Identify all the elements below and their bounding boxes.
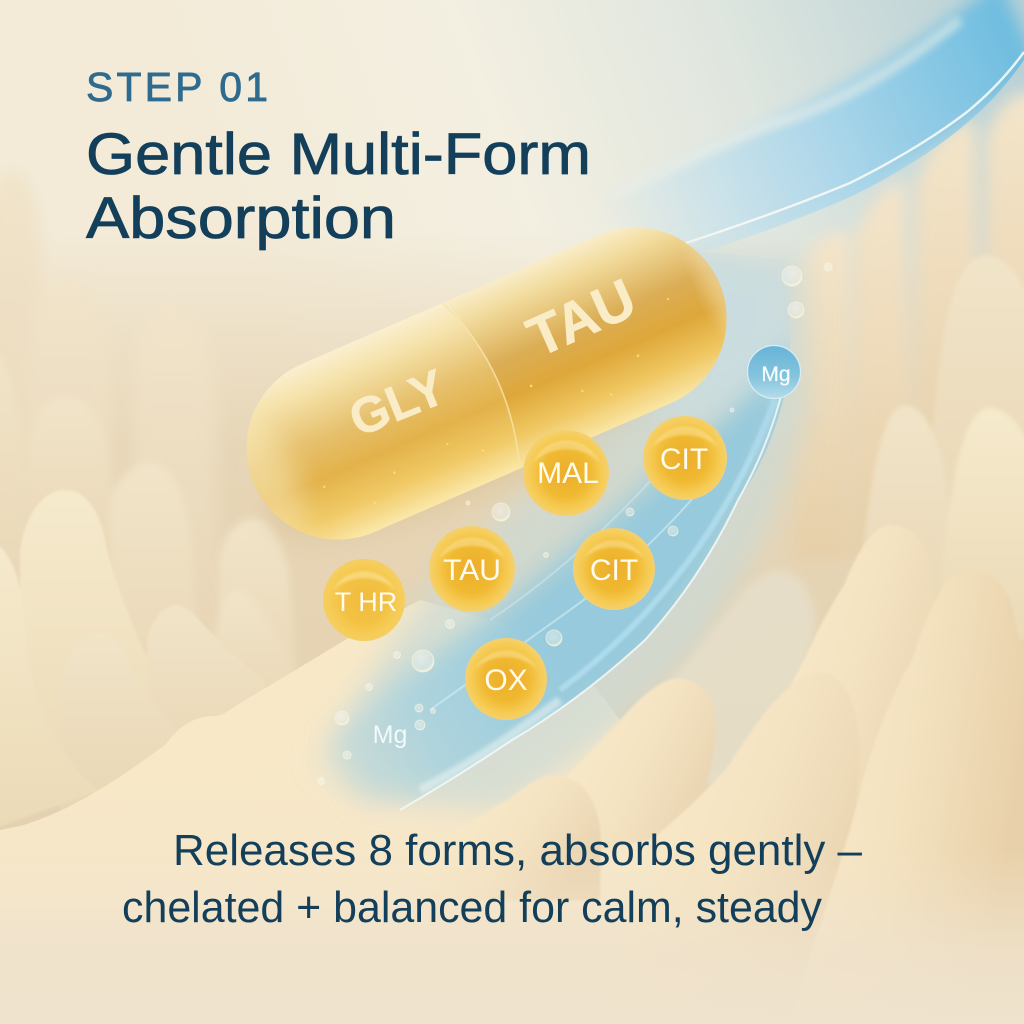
stream blue core <box>310 250 790 800</box>
capsule left half: GLY <box>246 302 522 540</box>
mid left villi <box>0 350 300 760</box>
heading: Gentle Multi-Form <box>86 122 591 187</box>
Mg ion bubble <box>748 346 800 398</box>
heading: Absorption <box>86 186 396 251</box>
small bubbles <box>318 263 832 784</box>
blue ribbon band <box>628 0 1024 252</box>
capsule label GLY: GLY <box>341 359 453 447</box>
orb OX <box>465 638 547 720</box>
capsule glints <box>309 298 697 520</box>
absorption stream <box>310 250 810 810</box>
villus mid low <box>540 678 716 860</box>
capsule seam <box>443 296 533 470</box>
left end glow <box>246 424 317 536</box>
sky over right tissue <box>300 0 1024 253</box>
villus tall back <box>730 525 935 860</box>
caption: chelated + balanced for calm, steady <box>122 883 822 932</box>
stream white edge <box>400 380 785 810</box>
orb TAU <box>429 526 515 612</box>
stream grey halo <box>330 250 810 810</box>
mid right villi <box>855 255 1024 680</box>
orb CIT lower: CIT <box>590 554 638 587</box>
form orbs <box>323 416 727 720</box>
caption <box>122 826 863 932</box>
Mg ion bubble: Mg <box>761 363 791 386</box>
capsule right half: TAU <box>446 227 727 468</box>
step label: STEP 01 <box>86 64 268 110</box>
ribbon white edge <box>686 52 1024 243</box>
orb THR: T HR <box>335 587 397 617</box>
right end glow <box>686 244 726 338</box>
front right villi <box>420 525 1024 1024</box>
orb CIT lower <box>573 528 655 610</box>
foreground fold <box>0 600 1024 1024</box>
orb CIT upper: CIT <box>660 443 708 476</box>
far left villi <box>0 170 220 700</box>
near left villi <box>0 490 265 830</box>
bottom haze <box>0 850 1024 1024</box>
orb CIT upper <box>643 416 727 500</box>
villus low left <box>420 775 601 900</box>
title block <box>86 64 591 251</box>
villus faded <box>640 570 815 800</box>
capsule shadow <box>245 283 715 577</box>
tissue base tone <box>0 230 1024 1024</box>
orb OX: OX <box>484 664 528 697</box>
orb THR <box>323 559 405 641</box>
orb MAL <box>523 430 609 516</box>
caption: Releases 8 forms, absorbs gently – <box>173 826 863 875</box>
capsule label TAU: TAU <box>518 266 645 369</box>
villus centre <box>600 672 860 1024</box>
villus front right <box>790 569 1024 1024</box>
sky and ribbon surface <box>628 0 1024 252</box>
orb TAU: TAU <box>443 554 501 587</box>
capsule <box>246 227 727 540</box>
orb MAL: MAL <box>537 457 599 490</box>
upper right villi columns <box>795 90 1024 560</box>
heading <box>86 122 591 251</box>
Mg label: Mg <box>373 721 407 749</box>
